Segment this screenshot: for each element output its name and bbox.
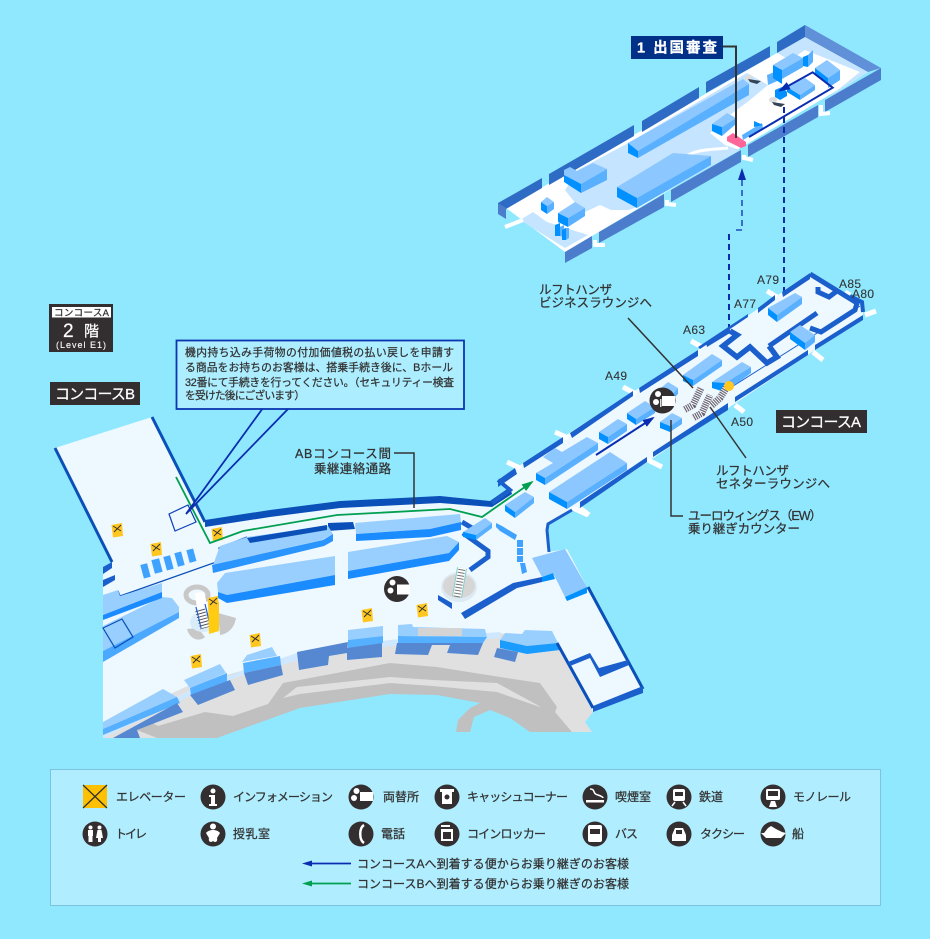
label: concourse B: コンコースB bbox=[55, 386, 135, 403]
legend: monorail bbox=[760, 784, 851, 810]
legend: nursing room bbox=[200, 822, 270, 846]
floor shading: upper level bbox=[520, 37, 868, 248]
legend: bus bbox=[582, 822, 638, 846]
label: passport control bbox=[631, 36, 723, 59]
legend: toilet bbox=[82, 822, 147, 846]
label: Lufthansa business lounge: ルフトハンザ bbox=[539, 283, 612, 297]
gate labels: A63 bbox=[683, 323, 705, 337]
south escalator rotunda bbox=[441, 568, 477, 602]
icon: currency exchange A bbox=[650, 388, 676, 414]
shops and facilities bbox=[541, 50, 840, 240]
panel: concourse level map bbox=[55, 273, 876, 745]
floor badge: (Level E1) bbox=[56, 340, 106, 350]
legend: blue route: コンコースAへ到着する便からお乗り継ぎのお客様 bbox=[357, 856, 629, 871]
route: transfer to concourse B green bbox=[176, 477, 532, 543]
floor: upper level bbox=[506, 37, 868, 252]
legend: elevator bbox=[83, 785, 186, 808]
legend: coin locker bbox=[434, 822, 546, 846]
floor badge: コンコースA bbox=[54, 308, 110, 319]
legend: information: インフォメーション bbox=[233, 790, 333, 804]
label: Eurowings counter: 乗り継ぎカウンター bbox=[688, 522, 800, 536]
label: concourse A: コンコースA bbox=[781, 414, 861, 431]
apron road bbox=[137, 663, 572, 738]
legend: nursing room: 授乳室 bbox=[233, 826, 270, 841]
gate labels: A49 bbox=[605, 369, 627, 383]
walkway curve bbox=[685, 148, 728, 157]
legend: cash corner bbox=[434, 784, 568, 810]
legend: exchange: 両替所 bbox=[383, 790, 419, 804]
legend: exchange bbox=[348, 784, 419, 810]
leader line bbox=[723, 46, 736, 138]
gate labels bbox=[605, 273, 874, 429]
label: AB connector: ABコンコース間 bbox=[295, 447, 391, 461]
route: concourse A blue arrow bbox=[596, 418, 653, 455]
back walls bbox=[498, 25, 805, 213]
floor badge bbox=[49, 304, 113, 352]
shops: concourse B side bbox=[103, 514, 461, 662]
icon: currency exchange B bbox=[384, 576, 410, 602]
gate tabs bbox=[505, 105, 830, 245]
VAT refund marker bbox=[169, 505, 196, 531]
side and front walls bbox=[498, 25, 881, 263]
legend: ship bbox=[760, 822, 804, 846]
shops: concourse A bbox=[463, 293, 815, 601]
label: Eurowings counter bbox=[688, 509, 822, 536]
legend: ship: 船 bbox=[792, 827, 804, 841]
passport control marker bbox=[727, 133, 746, 148]
legend: bus: バス bbox=[615, 827, 638, 841]
apron bbox=[103, 630, 593, 738]
route: passport control bbox=[749, 72, 833, 137]
gate labels: A80 bbox=[852, 287, 874, 301]
label: AB connector bbox=[295, 447, 391, 476]
panel: departure level map bbox=[498, 25, 881, 263]
legend: smoking: 喫煙室 bbox=[615, 790, 651, 804]
legend: taxi bbox=[666, 822, 745, 846]
callout: VAT refund: る商品をお持ちのお客様は、搭乗手続き後に、Bホール bbox=[185, 360, 453, 374]
legend: information bbox=[200, 784, 333, 810]
legend: taxi: タクシー bbox=[700, 827, 745, 841]
legend: smoking bbox=[582, 784, 651, 810]
label: concourse A bbox=[776, 410, 867, 433]
label: concourse B bbox=[50, 382, 140, 405]
panel: legend bbox=[50, 770, 880, 906]
legend: train bbox=[666, 784, 723, 810]
walls bbox=[55, 273, 863, 712]
planes icons bbox=[745, 75, 785, 107]
check-in counters bbox=[140, 523, 527, 579]
callout: VAT refund: 32番にて手続きを行ってください。（セキュリティー検査 bbox=[185, 375, 454, 389]
leader: Eurowings bbox=[671, 420, 683, 516]
legend: green route: コンコースBへ到着する便からお乗り継ぎのお客様 bbox=[357, 876, 629, 891]
label: Lufthansa senator lounge: セネターラウンジへ bbox=[716, 477, 830, 491]
legend: monorail: モノレール bbox=[793, 790, 851, 804]
gate labels: A77 bbox=[734, 297, 756, 311]
callout: VAT refund bbox=[176, 340, 464, 514]
label: Lufthansa senator lounge bbox=[716, 464, 830, 491]
gate tabs bbox=[507, 291, 876, 515]
legend: elevator: エレベーター bbox=[116, 790, 186, 804]
gate labels: A85 bbox=[839, 277, 861, 291]
water bbox=[217, 694, 530, 745]
floor badge: 2 bbox=[63, 321, 74, 342]
label: AB connector: 乗継連絡通路 bbox=[314, 461, 391, 476]
callout: VAT refund: 機内持ち込み手荷物の付加価値税の払い戻しを申請す bbox=[185, 345, 454, 359]
legend: coin locker: コインロッカー bbox=[467, 827, 546, 841]
connector: dashed routes between floors bbox=[729, 107, 788, 384]
terminal front glazing bbox=[103, 632, 500, 738]
leader: senator lounge bbox=[710, 407, 746, 458]
lounge escalators bbox=[684, 385, 728, 418]
terminal floor bbox=[55, 273, 863, 725]
elevator markers bbox=[112, 381, 734, 668]
gate buildings bbox=[103, 624, 560, 738]
label: Eurowings counter: ユーロウィングス（EW） bbox=[688, 509, 822, 523]
legend: cash corner: キャッシュコーナー bbox=[467, 790, 568, 804]
label: Lufthansa business lounge bbox=[539, 283, 652, 310]
floor badge: 階 bbox=[84, 323, 99, 340]
label: Lufthansa business lounge: ビジネスラウンジへ bbox=[539, 296, 652, 310]
callout: VAT refund: を受けた後にございます） bbox=[185, 388, 305, 402]
legend: telephone: 電話 bbox=[381, 827, 405, 841]
legend: toilet: トイレ bbox=[115, 827, 147, 841]
gate labels: A50 bbox=[731, 415, 753, 429]
legend: train: 鉄道 bbox=[699, 789, 723, 804]
leader: business lounge bbox=[628, 318, 693, 388]
road islands bbox=[283, 677, 541, 707]
central escalator bbox=[186, 587, 236, 640]
gate labels: A79 bbox=[757, 273, 779, 287]
leader: AB connector bbox=[394, 453, 414, 508]
label: passport control: 1 出国審査 bbox=[637, 38, 718, 56]
legend: telephone bbox=[348, 822, 405, 846]
label: Lufthansa senator lounge: ルフトハンザ bbox=[716, 464, 789, 478]
